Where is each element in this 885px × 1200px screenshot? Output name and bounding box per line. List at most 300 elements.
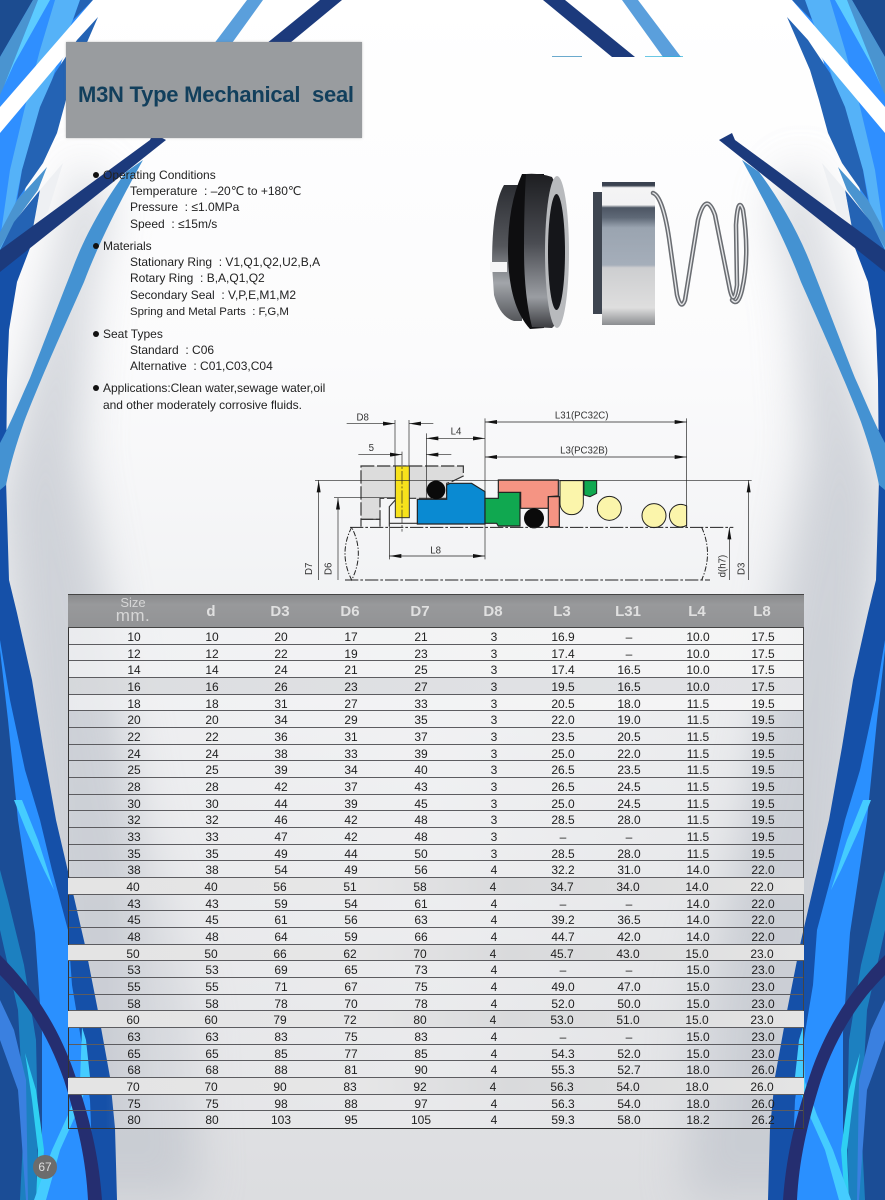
table body rows: – xyxy=(626,630,632,644)
table body rows: 45 xyxy=(414,797,428,811)
table body rows: 80 xyxy=(205,1113,219,1127)
table body rows: 20.5 xyxy=(617,730,641,744)
table body rows: 14.0 xyxy=(686,897,710,911)
section: seat types xyxy=(93,327,273,373)
table body rows: 45 xyxy=(127,913,141,927)
table body rows: 10 xyxy=(127,630,141,644)
table body rows: 23.0 xyxy=(750,1013,774,1027)
section: operating conditions: Temperature : –20℃ to +180℃ xyxy=(130,184,301,198)
table body rows: 36 xyxy=(274,730,288,744)
table header row: D6 xyxy=(340,603,360,620)
table body rows: 44 xyxy=(274,797,288,811)
table body rows: 92 xyxy=(413,1080,427,1094)
section: operating conditions: Speed : ≤15m/s xyxy=(130,217,217,231)
table body rows: 10.0 xyxy=(686,680,710,694)
table body rows: 68 xyxy=(205,1063,219,1077)
table body rows: 70 xyxy=(126,1080,140,1094)
table body rows: 98 xyxy=(274,1097,288,1111)
table body rows: 31.0 xyxy=(617,863,641,877)
table body rows: 23.5 xyxy=(617,763,641,777)
table body rows: 65 xyxy=(205,1047,219,1061)
dimension labels: L3(PC32B) xyxy=(560,445,608,456)
table body rows: 75 xyxy=(344,1030,358,1044)
table body rows: 30 xyxy=(127,797,141,811)
table header row: L8 xyxy=(753,603,771,620)
icon: conical spring xyxy=(653,193,746,304)
table body rows: 28.5 xyxy=(551,847,575,861)
table body rows: 39 xyxy=(274,763,288,777)
table body rows: 25 xyxy=(127,763,141,777)
table body rows: 12 xyxy=(127,647,141,661)
table body rows: 23 xyxy=(344,680,358,694)
table body rows: 14.0 xyxy=(686,930,710,944)
table body rows: 22.0 xyxy=(617,747,641,761)
table body rows: 24 xyxy=(127,747,141,761)
table body rows: 3 xyxy=(491,697,497,711)
table body rows: 4 xyxy=(490,1080,496,1094)
dimension labels: D6 xyxy=(323,563,334,575)
table header row: d xyxy=(206,603,216,620)
table body rows: 15.0 xyxy=(685,1013,709,1027)
table body rows: 38 xyxy=(127,863,141,877)
table body rows: 19.5 xyxy=(751,813,775,827)
dimension labels: L8 xyxy=(430,545,441,556)
table body rows: 22 xyxy=(274,647,288,661)
table header row: L3 xyxy=(553,603,571,620)
table body rows: 31 xyxy=(344,730,358,744)
table body rows: 11.5 xyxy=(687,763,709,777)
table body rows: 62 xyxy=(343,947,357,961)
table body rows: 90 xyxy=(414,1063,428,1077)
table body rows: 70 xyxy=(413,947,427,961)
table body rows: 3 xyxy=(491,713,497,727)
table body rows: 25 xyxy=(205,763,219,777)
table body rows: 28.5 xyxy=(551,813,575,827)
table body rows: 18.0 xyxy=(685,1080,709,1094)
table header row: D8 xyxy=(483,603,503,620)
table header row: D3 xyxy=(270,603,290,620)
spring section circles in pale yellow xyxy=(560,481,687,528)
table body rows: – xyxy=(626,830,632,844)
table body rows: 21 xyxy=(344,663,358,677)
dimension labels: L31(PC32C) xyxy=(555,411,609,422)
table body rows: 59.3 xyxy=(551,1113,575,1127)
table body rows: – xyxy=(560,830,566,844)
icon: stationary seat ring xyxy=(490,174,569,329)
section: seat types: Seat Types xyxy=(103,327,163,341)
section: materials: Stationary Ring : V1,Q1,Q2,U2,B,A xyxy=(130,255,320,269)
table body rows: 28.0 xyxy=(617,847,641,861)
table body rows: 26 xyxy=(274,680,288,694)
table body rows: 80 xyxy=(413,1013,427,1027)
table body rows: 42 xyxy=(344,813,358,827)
table body rows: 73 xyxy=(414,963,428,977)
table body rows: 59 xyxy=(274,897,288,911)
table body rows: 50.0 xyxy=(617,997,641,1011)
table body rows: 23.5 xyxy=(551,730,575,744)
seat: stationary part in grey xyxy=(361,466,463,527)
table body rows: 30 xyxy=(205,797,219,811)
table header row: mm. xyxy=(116,606,150,625)
table body rows: 17.5 xyxy=(751,663,775,677)
table body rows: 11.5 xyxy=(687,847,709,861)
table body rows: 22 xyxy=(127,730,141,744)
table body rows: 23.0 xyxy=(751,997,775,1011)
table body rows: 38 xyxy=(205,863,219,877)
table body rows: 54 xyxy=(344,897,358,911)
table body rows: – xyxy=(626,963,632,977)
table body rows: 22.0 xyxy=(751,863,775,877)
table body rows: 80 xyxy=(127,1113,141,1127)
table body rows: 4 xyxy=(491,1097,497,1111)
table body rows: 10.0 xyxy=(686,647,710,661)
table body rows: 23.0 xyxy=(750,947,774,961)
table body rows: 63 xyxy=(127,1030,141,1044)
table body rows: 44 xyxy=(344,847,358,861)
table body rows: 32 xyxy=(205,813,219,827)
table body rows: 24 xyxy=(274,663,288,677)
table body rows: 18.0 xyxy=(686,1063,710,1077)
table body rows: 53 xyxy=(127,963,141,977)
table body rows: 11.5 xyxy=(687,747,709,761)
table body rows: 26.0 xyxy=(751,1097,775,1111)
table header row: L4 xyxy=(688,603,706,620)
table body rows: 22.0 xyxy=(751,897,775,911)
table body rows: 32 xyxy=(127,813,141,827)
table body rows: 24.5 xyxy=(617,780,641,794)
table body rows: 42 xyxy=(344,830,358,844)
table body rows: 16 xyxy=(205,680,219,694)
table body rows: 17.4 xyxy=(551,663,575,677)
table body rows: 34 xyxy=(274,713,288,727)
table body rows: 55 xyxy=(205,980,219,994)
section: operating conditions xyxy=(93,168,301,231)
table body rows: 67 xyxy=(344,980,358,994)
table body rows: 17.5 xyxy=(751,680,775,694)
table body rows: 95 xyxy=(344,1113,358,1127)
table body rows: 3 xyxy=(491,663,497,677)
table body rows: 54 xyxy=(274,863,288,877)
table body rows: 21 xyxy=(414,630,428,644)
table body rows: 45.7 xyxy=(550,947,574,961)
table body rows: 31 xyxy=(274,697,288,711)
table body rows: 48 xyxy=(127,930,141,944)
table body rows: 3 xyxy=(491,780,497,794)
section: materials: Spring and Metal Parts : F,G,M xyxy=(130,306,289,318)
table body rows: 26.2 xyxy=(751,1113,775,1127)
table body rows: 47.0 xyxy=(617,980,641,994)
table body rows: 20 xyxy=(127,713,141,727)
table body rows: 17.4 xyxy=(551,647,575,661)
table body rows: 81 xyxy=(344,1063,358,1077)
table body rows: 34 xyxy=(344,763,358,777)
table body rows: 49 xyxy=(344,863,358,877)
table body rows: 23.0 xyxy=(751,1047,775,1061)
table body rows: 23.0 xyxy=(751,980,775,994)
table body rows: 27 xyxy=(344,697,358,711)
table body rows: 4 xyxy=(491,930,497,944)
table body rows: 3 xyxy=(491,830,497,844)
product photo: seal ring and spring xyxy=(492,174,748,329)
table body rows: 83 xyxy=(343,1080,357,1094)
black o-ring (seat) xyxy=(427,481,445,499)
table body rows: 97 xyxy=(414,1097,428,1111)
table body rows: 11.5 xyxy=(687,830,709,844)
table body rows: – xyxy=(626,647,632,661)
table body rows: 64 xyxy=(274,930,288,944)
table body rows: 3 xyxy=(491,730,497,744)
table body rows: 105 xyxy=(411,1113,431,1127)
table body rows: 4 xyxy=(491,913,497,927)
table body rows: 3 xyxy=(491,630,497,644)
table body rows: 78 xyxy=(414,997,428,1011)
table body rows: 22.0 xyxy=(750,880,774,894)
table body rows: 19.5 xyxy=(751,830,775,844)
section: applications: and other moderately corrosive fluids. xyxy=(103,398,302,412)
table body rows: 29 xyxy=(344,713,358,727)
dimension labels: D8 xyxy=(356,412,369,423)
table body rows: 63 xyxy=(205,1030,219,1044)
table body rows: 50 xyxy=(126,947,140,961)
table body rows: 56 xyxy=(273,880,287,894)
table body rows: 66 xyxy=(273,947,287,961)
table body rows: 16.5 xyxy=(617,680,641,694)
green retainer xyxy=(485,492,520,526)
table body rows: 22.0 xyxy=(751,913,775,927)
table body rows: 15.0 xyxy=(686,980,710,994)
table body rows: 72 xyxy=(343,1013,357,1027)
table body rows: 25 xyxy=(414,663,428,677)
table body rows: 37 xyxy=(414,730,428,744)
table body rows: 11.5 xyxy=(687,797,709,811)
table body rows: 88 xyxy=(274,1063,288,1077)
table body rows: 85 xyxy=(414,1047,428,1061)
black o-ring (shaft) xyxy=(524,508,544,528)
dimension labels: 5 xyxy=(369,443,374,454)
specification list xyxy=(93,168,325,412)
table body rows: 19 xyxy=(344,647,358,661)
table body rows: 19.5 xyxy=(551,680,575,694)
table body rows: 58 xyxy=(413,880,427,894)
table body rows: 40 xyxy=(126,880,140,894)
table body rows: 35 xyxy=(127,847,141,861)
table body rows: 19.5 xyxy=(751,747,775,761)
table body rows: 39.2 xyxy=(551,913,575,927)
blue rotary ring xyxy=(417,483,485,524)
table body rows: 58 xyxy=(205,997,219,1011)
table body rows: 42 xyxy=(274,780,288,794)
table body rows: 19.5 xyxy=(751,780,775,794)
table body rows: 26.5 xyxy=(551,763,575,777)
table body rows: 10.0 xyxy=(686,663,710,677)
table body rows: 49.0 xyxy=(551,980,575,994)
table body rows: 4 xyxy=(490,947,496,961)
table body rows: 33 xyxy=(344,747,358,761)
dimension labels: d(h7) xyxy=(717,555,728,577)
table header row xyxy=(68,594,804,628)
table body rows: 39 xyxy=(414,747,428,761)
table body rows: 27 xyxy=(414,680,428,694)
table body rows: 79 xyxy=(273,1013,287,1027)
table body rows: 14.0 xyxy=(686,863,710,877)
table body rows: 26.0 xyxy=(751,1063,775,1077)
dimension labels: D3 xyxy=(737,563,748,575)
table body rows: 28.0 xyxy=(617,813,641,827)
table body rows: 19.0 xyxy=(617,713,641,727)
section: applications: Applications:Clean water,sewage water,oil xyxy=(103,381,325,395)
table body rows: 35 xyxy=(414,713,428,727)
page number badge: 67 xyxy=(38,1160,52,1174)
table body rows: 65 xyxy=(127,1047,141,1061)
table body rows: 53.0 xyxy=(550,1013,574,1027)
table body rows: 66 xyxy=(414,930,428,944)
table body rows: 16.5 xyxy=(617,663,641,677)
table body rows: 56 xyxy=(344,913,358,927)
table body rows: 15.0 xyxy=(685,947,709,961)
table body rows: 24 xyxy=(205,747,219,761)
table header row: D7 xyxy=(410,603,430,620)
table body rows: 18.0 xyxy=(686,1097,710,1111)
table body rows: 90 xyxy=(273,1080,287,1094)
table body rows: 70 xyxy=(204,1080,218,1094)
table body rows: 14 xyxy=(205,663,219,677)
table body rows: 33 xyxy=(205,830,219,844)
table body rows xyxy=(68,628,804,1128)
table header row: L31 xyxy=(615,603,641,620)
table body rows: 34.7 xyxy=(550,880,574,894)
table body rows: 88 xyxy=(344,1097,358,1111)
table body rows: 83 xyxy=(414,1030,428,1044)
table body rows: 17.5 xyxy=(751,630,775,644)
table body rows: 4 xyxy=(491,980,497,994)
table body rows: 19.5 xyxy=(751,797,775,811)
section: materials xyxy=(93,239,320,318)
table body rows: 15.0 xyxy=(686,1047,710,1061)
table body rows: 58.0 xyxy=(617,1113,641,1127)
section: operating conditions: Operating Conditions xyxy=(103,168,216,182)
table body rows: 15.0 xyxy=(686,997,710,1011)
table body rows: 46 xyxy=(274,813,288,827)
table body rows: 18 xyxy=(205,697,219,711)
small green clip xyxy=(584,481,597,497)
table body rows: 19.5 xyxy=(751,763,775,777)
table body rows: 14.0 xyxy=(686,913,710,927)
table body rows: 70 xyxy=(344,997,358,1011)
section: materials: Materials xyxy=(103,239,152,253)
table body rows: 3 xyxy=(491,847,497,861)
table body rows: 11.5 xyxy=(687,713,709,727)
table body rows: 51.0 xyxy=(616,1013,640,1027)
table body rows: 3 xyxy=(491,747,497,761)
table body rows: 26.5 xyxy=(551,780,575,794)
table body rows: 54.3 xyxy=(551,1047,575,1061)
table body rows: 23.0 xyxy=(751,963,775,977)
table body rows: 47 xyxy=(274,830,288,844)
table body rows: – xyxy=(626,1030,632,1044)
table body rows: 4 xyxy=(490,1013,496,1027)
table body rows: 28 xyxy=(205,780,219,794)
table body rows: 19.5 xyxy=(751,847,775,861)
table body rows: 37 xyxy=(344,780,358,794)
table body rows: 4 xyxy=(491,1113,497,1127)
dimension labels: D7 xyxy=(304,563,315,575)
section: seat types: Standard : C06 xyxy=(130,343,214,357)
table body rows: 69 xyxy=(274,963,288,977)
table body rows: 43.0 xyxy=(616,947,640,961)
table body rows: 3 xyxy=(491,763,497,777)
table body rows: 32.2 xyxy=(551,863,575,877)
table body rows: 49 xyxy=(274,847,288,861)
table body rows: 4 xyxy=(491,963,497,977)
table body rows: 43 xyxy=(127,897,141,911)
table body rows: 4 xyxy=(491,1030,497,1044)
table body rows: 3 xyxy=(491,813,497,827)
table body rows: 52.7 xyxy=(617,1063,641,1077)
table body rows: 78 xyxy=(274,997,288,1011)
table body rows: 22.0 xyxy=(551,713,575,727)
table body rows: 75 xyxy=(127,1097,141,1111)
table body rows: 18 xyxy=(127,697,141,711)
table body rows: 71 xyxy=(274,980,288,994)
table body rows: 42.0 xyxy=(617,930,641,944)
table body rows: 14.0 xyxy=(685,880,709,894)
table body rows: – xyxy=(560,897,566,911)
table body rows: 26.0 xyxy=(750,1080,774,1094)
table body rows: 25.0 xyxy=(551,797,575,811)
table body rows: 20.5 xyxy=(551,697,575,711)
table body rows: 43 xyxy=(414,780,428,794)
cross-section dimension diagram xyxy=(304,411,752,581)
table body rows: 19.5 xyxy=(751,713,775,727)
dimension arrows xyxy=(319,422,749,580)
table body rows: 23.0 xyxy=(751,1030,775,1044)
table body rows: 50 xyxy=(204,947,218,961)
table body rows: 45 xyxy=(205,913,219,927)
table body rows: 55 xyxy=(127,980,141,994)
table body rows: 3 xyxy=(491,680,497,694)
dimension labels xyxy=(304,411,748,577)
table body rows: 16.9 xyxy=(551,630,575,644)
table body rows: 15.0 xyxy=(686,1030,710,1044)
page number badge xyxy=(33,1155,57,1179)
table body rows: 12 xyxy=(205,647,219,661)
table body rows: 85 xyxy=(274,1047,288,1061)
table body rows: 51 xyxy=(343,880,357,894)
table body rows: 65 xyxy=(344,963,358,977)
table body rows: 3 xyxy=(491,647,497,661)
table body rows: 11.5 xyxy=(687,730,709,744)
table body rows: 39 xyxy=(344,797,358,811)
table body rows: 4 xyxy=(491,1063,497,1077)
table body rows: 63 xyxy=(414,913,428,927)
section: applications xyxy=(93,381,325,412)
table body rows: 61 xyxy=(274,913,288,927)
table body rows: 44.7 xyxy=(551,930,575,944)
table body rows: 11.5 xyxy=(687,697,709,711)
table body rows: 4 xyxy=(491,863,497,877)
table body rows: – xyxy=(560,1030,566,1044)
table body rows: 56 xyxy=(414,863,428,877)
table body rows: 54.0 xyxy=(616,1080,640,1094)
shaft outline and centre lines xyxy=(315,418,752,580)
table body rows: 68 xyxy=(127,1063,141,1077)
table body rows: 53 xyxy=(205,963,219,977)
table body rows: 4 xyxy=(491,897,497,911)
table body rows: 40 xyxy=(414,763,428,777)
table body rows: 15.0 xyxy=(686,963,710,977)
table body rows: 43 xyxy=(205,897,219,911)
table body rows: 56.3 xyxy=(550,1080,574,1094)
